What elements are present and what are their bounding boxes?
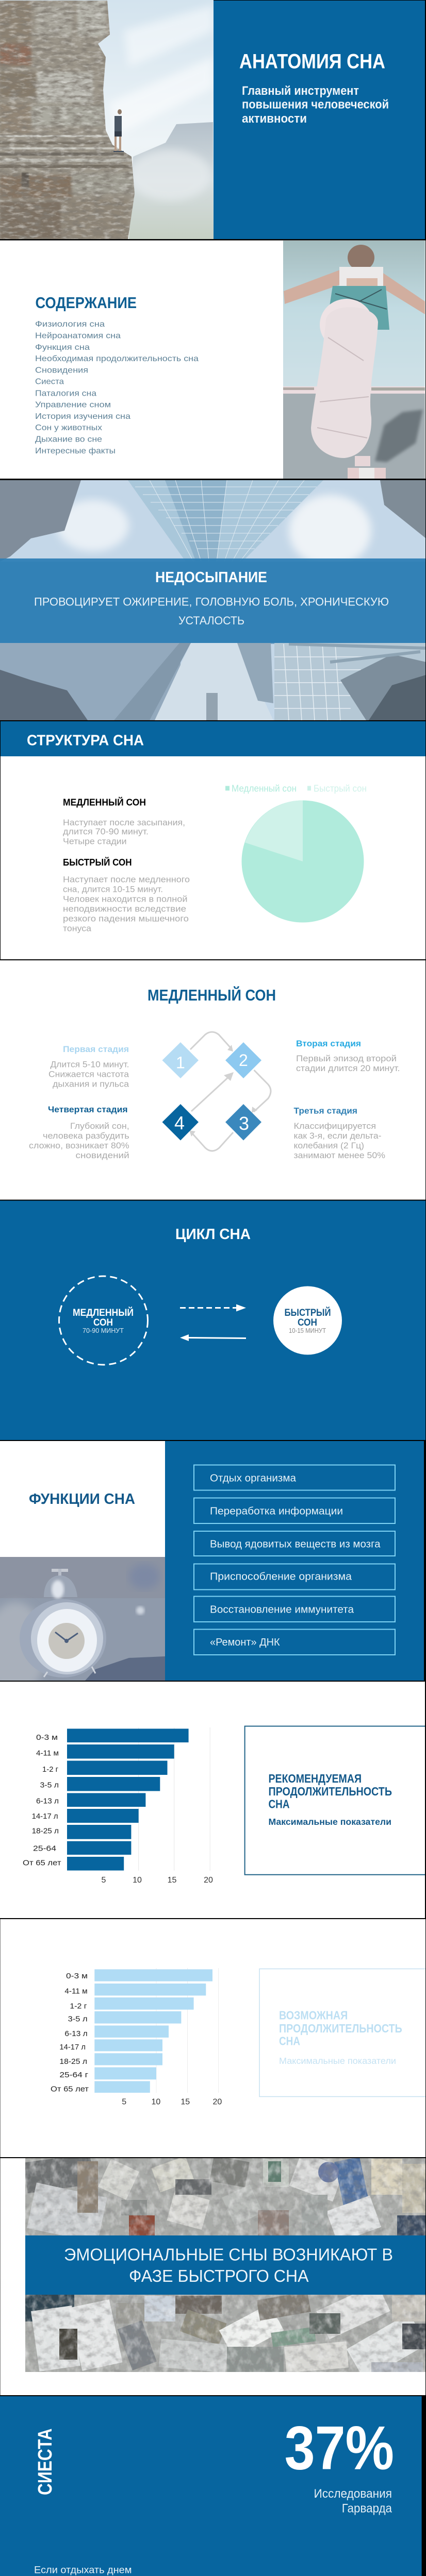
bar chart: recommended hours: 6-13 л (36, 1797, 59, 1805)
caption text: ПРОВОЦИРУЕТ ОЖИРЕНИЕ, ГОЛОВНУЮ БОЛЬ, ХРОНИЧЕСКУЮ (34, 596, 389, 608)
bar chart: possible hours: От 65 лет (51, 2085, 89, 2094)
panel: sleep deprivation (0, 480, 426, 720)
text: slow sleep: Четыре стадии (63, 837, 127, 846)
panel background (0, 1919, 425, 2157)
bar chart: possible hours: 25-64 г (59, 2071, 89, 2079)
left white area (0, 1441, 165, 1557)
panel: contents (0, 241, 425, 479)
function labels: Приспособление организма (210, 1571, 352, 1582)
bar chart: recommended hours: 14-17 л (32, 1812, 58, 1821)
text: third stage: Классифицируется (294, 1121, 376, 1131)
diamond 4: 4 (174, 1112, 185, 1133)
text: fast sleep: резкого падения мышечного (63, 913, 189, 923)
panel: possible duration (0, 1919, 425, 2157)
photo: man standing on a cliff (0, 0, 214, 239)
filled circle: fast sleep: 10-15 МИНУТ (289, 1327, 326, 1334)
panel: emotional dreams (0, 2152, 426, 2395)
text: slow sleep (63, 796, 185, 846)
panel: title slide (0, 0, 425, 239)
bar chart: possible hours: 6-13 л (64, 2029, 88, 2038)
panel background (0, 1682, 425, 1918)
text: third stage: колебания (2 Гц) (294, 1141, 364, 1150)
contents list: Интересные факты (35, 447, 116, 455)
source: Гарварда (342, 2502, 392, 2516)
legend (225, 783, 367, 793)
dashed circle: slow sleep (59, 1276, 148, 1365)
dashed arrow (180, 1304, 246, 1312)
contents list: Сиеста (35, 378, 64, 386)
description: Если отдыхать днем (34, 2565, 132, 2575)
photo: skateboarder sole (283, 241, 425, 479)
callout box: Максимальные показатели (279, 2056, 396, 2066)
text: second stage: стадии длится 20 минут. (296, 1063, 400, 1073)
heading: СТРУКТУРА СНА (27, 732, 144, 749)
legend: Быстрый сон (314, 783, 367, 793)
text: fast sleep: неподвижности вследствие (63, 904, 186, 913)
panel background (1, 721, 425, 959)
bar chart: recommended hours: 4-11 м (36, 1749, 59, 1758)
text: first stage: дыхания и пульса (53, 1079, 129, 1089)
callout box: РЕКОМЕНДУЕМАЯ (268, 1772, 362, 1785)
contents list: Физиология сна (35, 320, 105, 329)
text: third stage: занимают менее 50% (294, 1150, 385, 1160)
diamond 2: 2 (239, 1051, 248, 1070)
pie chart (241, 801, 364, 922)
contents list: Паталогия сна (35, 389, 96, 398)
dashed circle: slow sleep: 70-90 МИНУТ (83, 1327, 124, 1334)
bar chart: recommended hours (23, 1727, 213, 1885)
bar chart: possible hours: 3-5 л (68, 2015, 88, 2024)
rotated heading: СИЕСТА (35, 2429, 56, 2495)
source (314, 2487, 392, 2516)
dashed circle: slow sleep: МЕДЛЕННЫЙ (73, 1306, 134, 1318)
heading: ФУНКЦИИ СНА (29, 1491, 135, 1507)
bar chart: possible hours: 15 (181, 2098, 190, 2107)
bar chart: recommended hours: 25-64 (33, 1844, 56, 1853)
callout box: ПРОДОЛЖИТЕЛЬНОСТЬ (279, 2022, 402, 2035)
bar chart: recommended hours: От 65 лет (23, 1858, 61, 1867)
title: АНАТОМИЯ СНА (239, 50, 385, 73)
text: first stage: Длится 5-10 минут. (51, 1059, 129, 1070)
function labels: Переработка информации (210, 1505, 343, 1517)
dashed circle: slow sleep: СОН (93, 1317, 113, 1328)
callout box: ВОЗМОЖНАЯ (279, 2009, 348, 2022)
caption text: ЭМОЦИОНАЛЬНЫЕ СНЫ ВОЗНИКАЮТ В (64, 2245, 393, 2264)
panel: slow sleep stages (0, 960, 425, 1199)
heading: ЦИКЛ СНА (175, 1226, 251, 1243)
caption text (34, 596, 389, 627)
caption text: ФАЗЕ БЫСТРОГО СНА (129, 2266, 308, 2285)
text: second stage: Первый эпизод второй (296, 1054, 397, 1063)
photo: skyscrapers (0, 480, 426, 720)
contents list: Необходимая продолжительность сна (35, 354, 199, 363)
bar chart: possible hours: 0-3 м (66, 1972, 88, 1980)
bar chart: possible hours: 4-11 м (64, 1987, 88, 1996)
text: first stage: Снижается частота (48, 1070, 129, 1079)
panel: sleep functions (0, 1441, 424, 1695)
caption text (64, 2245, 393, 2285)
text: fast sleep: тонуса (63, 923, 92, 933)
right blue area (165, 1441, 424, 1681)
filled circle: fast sleep: СОН (298, 1317, 317, 1328)
callout box: ПРОДОЛЖИТЕЛЬНОСТЬ (268, 1785, 392, 1798)
solid arrow (180, 1334, 246, 1341)
text: second stage: Вторая стадия (296, 1039, 361, 1048)
bar chart: possible hours: 5 (122, 2098, 126, 2107)
filled circle: fast sleep (273, 1286, 342, 1355)
function labels: Вывод ядовитых веществ из мозга (210, 1538, 381, 1550)
text: slow sleep: длится 70-90 минут. (63, 827, 149, 837)
photo: alarm clock (0, 1557, 165, 1681)
function labels: Восстановление иммунитета (210, 1604, 354, 1615)
heading: МЕДЛЕННЫЙ СОН (148, 986, 276, 1004)
function boxes (194, 1465, 395, 1655)
text: fourth stage (29, 1105, 129, 1160)
caption band (25, 2235, 425, 2295)
panel background (0, 2396, 422, 2576)
subtitle (242, 84, 389, 126)
text: fast sleep: БЫСТРЫЙ СОН (63, 857, 132, 868)
text: fourth stage: человека разбудить (43, 1131, 129, 1141)
text: fast sleep (63, 857, 190, 933)
function labels: Отдых организма (210, 1472, 297, 1484)
subtitle: Главный инструмент (242, 84, 359, 98)
panel: sleep cycle (0, 1200, 425, 1440)
diamond 1 (162, 1042, 199, 1078)
contents list: История изучения сна (35, 412, 130, 421)
text: fourth stage: Четвертая стадия (48, 1105, 128, 1114)
legend: Медленный сон (232, 783, 297, 793)
panel: title background (214, 1, 425, 239)
subtitle: повышения человеческой (242, 97, 389, 111)
header band (1, 721, 425, 756)
filled circle: fast sleep: БЫСТРЫЙ (285, 1306, 331, 1318)
caption band (0, 558, 425, 643)
text: third stage (294, 1106, 385, 1160)
callout box (245, 1726, 425, 1875)
bar chart: possible hours: 18-25 л (59, 2057, 87, 2066)
bar chart: possible hours (51, 1968, 222, 2107)
bar chart: possible hours: 20 (213, 2098, 222, 2107)
text: first stage: Первая стадия (63, 1044, 129, 1054)
photo: pile of books (23, 2152, 426, 2380)
panel: sleep structure (1, 721, 425, 959)
contents list: Сон у животных (35, 423, 102, 432)
bar chart: recommended hours: 15 (168, 1876, 176, 1885)
bar chart: recommended hours: 10 (133, 1876, 142, 1885)
contents list (35, 320, 199, 455)
bar chart: recommended hours: 1-2 г (42, 1765, 59, 1774)
caption text: УСТАЛОСТЬ (178, 614, 244, 627)
text: fast sleep: Наступает после медленного (63, 875, 190, 884)
text: second stage (296, 1039, 400, 1073)
panel: recommended duration (0, 1682, 425, 1918)
subtitle: активности (242, 112, 307, 126)
text: fast sleep: Человек находится в полной (63, 894, 188, 904)
callout box: Максимальные показатели (268, 1817, 391, 1827)
bar chart: recommended hours: 20 (204, 1876, 213, 1885)
bar chart: possible hours: 10 (152, 2098, 160, 2107)
heading: НЕДОСЫПАНИЕ (155, 569, 267, 586)
callout box (259, 1969, 425, 2097)
contents background (0, 241, 425, 479)
contents list: Управление сном (35, 400, 111, 409)
arrows between stages (189, 1032, 271, 1151)
bar chart: recommended hours: 5 (102, 1876, 106, 1885)
contents list: Функция сна (35, 343, 90, 352)
contents list: Дыхание во сне (35, 435, 102, 444)
diamond 1: 1 (176, 1053, 185, 1072)
contents list: Нейроанатомия сна (35, 331, 121, 340)
callout box: СНА (279, 2034, 300, 2047)
text: fast sleep: сна, длится 10-15 минут. (63, 884, 163, 894)
diamond 4 (162, 1104, 199, 1141)
text: slow sleep: Наступает после засыпания, (63, 818, 185, 827)
function labels (210, 1472, 381, 1648)
heading: СОДЕРЖАНИЕ (35, 294, 137, 312)
text: fourth stage: сновидений (75, 1150, 129, 1160)
text: third stage: Третья стадия (294, 1106, 357, 1116)
text: third stage: как 3-я, если дельта- (294, 1131, 382, 1141)
bar chart: recommended hours: 18-25 л (32, 1827, 59, 1836)
diamond 3 (225, 1104, 261, 1141)
panel background (0, 960, 425, 1199)
bar chart: recommended hours: 3-5 л (40, 1781, 59, 1790)
contents list: Сновидения (35, 366, 88, 375)
callout box: СНА (268, 1798, 290, 1811)
big number: 37% (285, 2414, 394, 2483)
panel: siesta (0, 2396, 422, 2576)
bar chart: possible hours: 1-2 г (70, 2002, 87, 2010)
diamond 2 (225, 1042, 261, 1078)
source: Исследования (314, 2487, 392, 2501)
panel background (0, 2158, 425, 2395)
bar chart: possible hours: 14-17 л (59, 2043, 86, 2052)
panel background (0, 1200, 425, 1440)
text: first stage (48, 1044, 129, 1089)
text: fourth stage: сложно, возникает 80% (29, 1141, 129, 1150)
diamond 3: 3 (239, 1113, 249, 1134)
text: slow sleep: МЕДЛЕННЫЙ СОН (63, 796, 146, 808)
function labels: «Ремонт» ДНК (210, 1637, 280, 1648)
text: fourth stage: Глубокий сон, (70, 1121, 129, 1131)
bar chart: recommended hours: 0-3 м (36, 1733, 58, 1742)
